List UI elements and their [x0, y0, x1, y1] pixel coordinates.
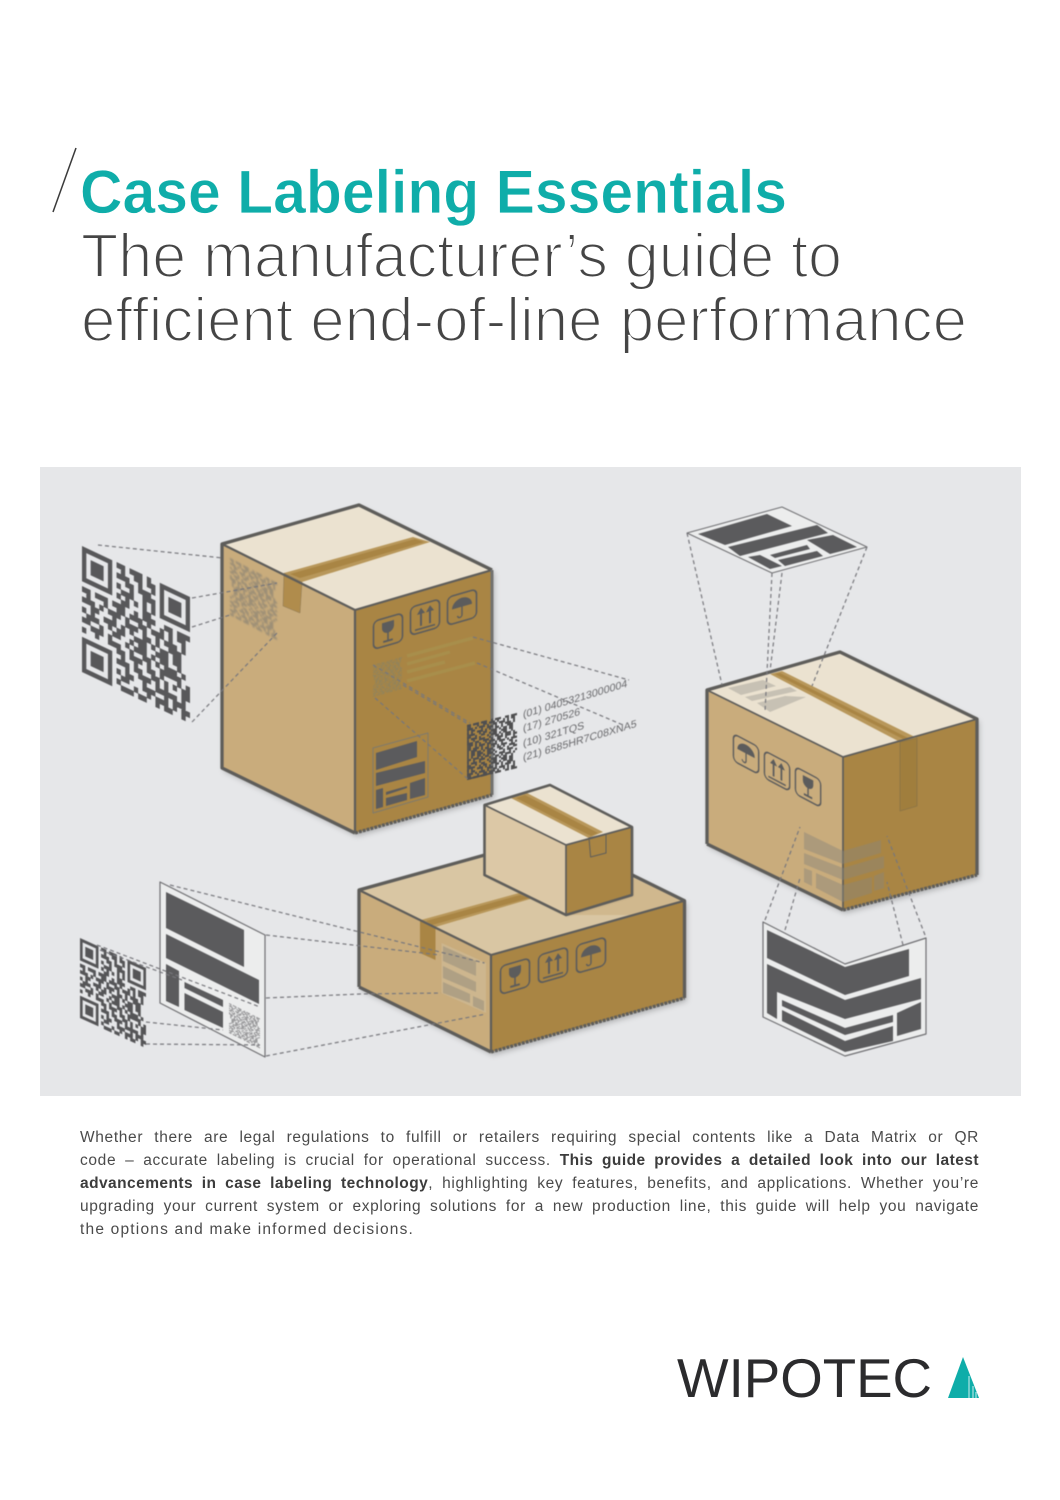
cardboard box: low with small box on top	[359, 785, 684, 1052]
handling icons	[500, 937, 606, 994]
dashed leader lines: tall box	[98, 545, 629, 779]
WIPOTEC logo	[677, 1347, 979, 1409]
packing tape	[770, 671, 917, 811]
handling icons	[374, 589, 476, 649]
bottom label callout	[763, 922, 926, 1056]
heading: Case Labeling Essentials	[80, 158, 787, 226]
packing tape	[283, 537, 430, 613]
logo triangle	[948, 1357, 979, 1398]
GS1 text lines: (21) 6585HR7C08XNA5	[523, 718, 637, 764]
cardboard box: tall	[222, 505, 492, 833]
body paragraph: advancements in case labeling technology, highlighting key features, benefits, and applications. Whether you’re	[80, 1175, 979, 1192]
GS1 text lines: (17) 270526	[523, 706, 580, 735]
faint data matrix and lines	[373, 638, 475, 696]
GS1 text lines	[523, 678, 637, 764]
body paragraph	[80, 1129, 979, 1238]
faint QR on side	[230, 559, 277, 639]
body paragraph: upgrading your current system or exploring solutions for a new production line, this guide will help you navigate	[80, 1198, 979, 1215]
body paragraph: the options and make informed decisions.	[80, 1221, 414, 1238]
label callout left	[160, 882, 265, 1057]
body paragraph: code – accurate labeling is crucial for operational success. This guide provides a detailed look into our latest	[80, 1152, 979, 1169]
packing tape	[420, 893, 534, 960]
body paragraph: Whether there are legal regulations to fulfill or retailers requiring special contents like a Data Matrix or QR	[80, 1129, 979, 1146]
faint wrap-around label	[804, 832, 884, 902]
slash mark	[53, 148, 76, 212]
subtitle line 2: efficient end-of-line performance	[81, 286, 967, 355]
QR callout bottom left	[80, 938, 146, 1048]
faint label on low box	[442, 943, 486, 1013]
faint top label	[728, 680, 806, 712]
data matrix callout	[467, 678, 637, 779]
small box on top	[484, 785, 632, 915]
cardboard box: right	[707, 652, 977, 910]
handling icons	[733, 734, 821, 807]
top label callout	[687, 507, 867, 573]
dashed leader lines: low box	[97, 885, 486, 1056]
title block	[52, 148, 967, 355]
artwork	[80, 505, 977, 1057]
QR callout left	[82, 546, 190, 723]
dashed leader lines: right box	[687, 533, 925, 945]
GS1 text lines: (10) 321TQS	[523, 720, 584, 750]
GS1 text lines: (01) 04053213000004	[523, 678, 627, 721]
logo wordmark: WIPOTEC	[677, 1347, 932, 1409]
subtitle line 1: The manufacturer’s guide to	[81, 222, 842, 291]
panel background	[40, 467, 1021, 1096]
shipping label on tall box	[373, 733, 428, 813]
